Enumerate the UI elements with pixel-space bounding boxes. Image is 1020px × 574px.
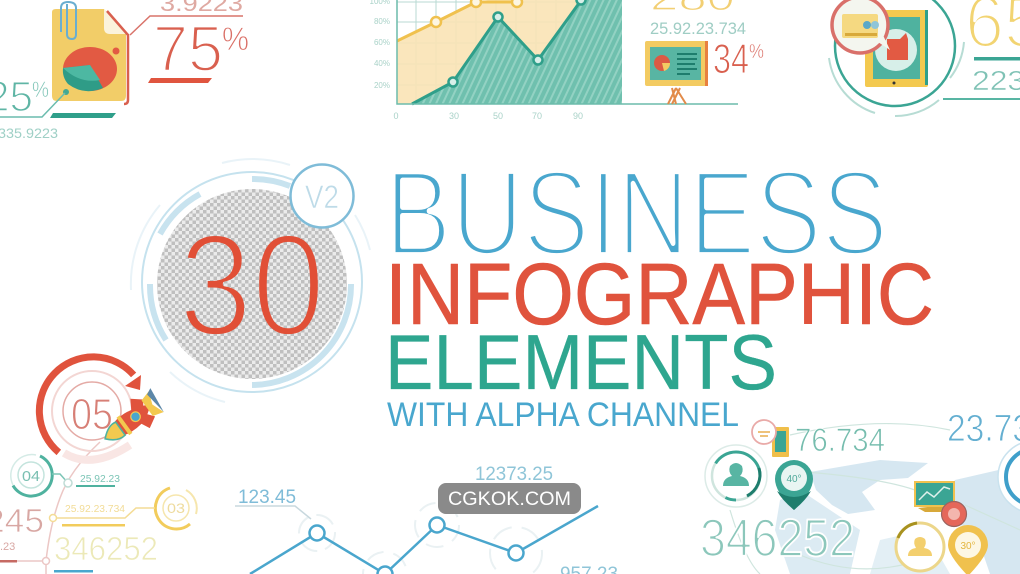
- y axis labels: 20%: [374, 81, 390, 90]
- text: 123.45: 123.45: [238, 487, 296, 508]
- callout line: green: [0, 93, 65, 117]
- panel: rocket timeline, bottom left: [0, 357, 197, 574]
- x axis labels: 0: [393, 111, 399, 121]
- icon: speech bubble with card: [832, 0, 890, 53]
- bar: red short: [0, 560, 17, 562]
- ring: outer faint arcs: [131, 159, 370, 402]
- connector 04: [52, 474, 72, 487]
- icon: map pin yellow: [948, 525, 988, 574]
- icon: user ring green: [705, 445, 767, 507]
- subtitle: WITH ALPHA CHANNEL: WITH ALPHA CHANNEL: [387, 396, 739, 434]
- red progress arrow: [39, 357, 141, 452]
- connector 03: [50, 508, 155, 522]
- line: green: [943, 98, 1020, 100]
- text: 23: .23: [0, 541, 15, 553]
- number 30: 30: [179, 204, 325, 366]
- data points: [310, 518, 524, 574]
- bar: green: [974, 57, 1020, 60]
- ring: thick light-blue segments: [150, 179, 351, 385]
- x axis labels: [393, 111, 583, 121]
- panel: 30 badge with V2: [131, 159, 370, 402]
- text: 12373.25: 12373.25: [475, 464, 553, 485]
- green area series: [412, 0, 622, 104]
- line series: [250, 506, 598, 574]
- y axis labels: 40%: [374, 59, 390, 68]
- icon: rocket: [95, 386, 169, 453]
- bar: yellow: [62, 524, 125, 526]
- chart axes: [397, 0, 738, 104]
- panel: blue line chart, bottom centre: [235, 464, 618, 574]
- watermark: CGKOK.COM: [438, 483, 581, 514]
- ring: 04: 04: [22, 468, 40, 485]
- icon: blue user ring: [998, 441, 1020, 513]
- title: INFOGRAPHIC: INFOGRAPHIC: [385, 246, 934, 343]
- ring: main circle: [835, 0, 955, 106]
- bar: blue: [54, 570, 93, 572]
- y axis labels: 80%: [374, 17, 390, 26]
- text: 346252: 346252: [700, 509, 855, 568]
- node: [42, 558, 50, 564]
- x axis labels: 30: [449, 111, 459, 121]
- icon: tablet: [865, 10, 928, 87]
- x axis labels: 70: [532, 111, 542, 121]
- ring: inner: [63, 382, 121, 440]
- icon: phone: [772, 427, 789, 457]
- ring: 03: [155, 488, 197, 529]
- icon: map pin green: 40°: [786, 474, 802, 485]
- y axis labels: [370, 0, 390, 90]
- ring: pink outer: [52, 371, 132, 451]
- map: world map silhouette: [775, 460, 1020, 574]
- ring: thin outer: [142, 172, 362, 392]
- title: ELEMENTS: ELEMENTS: [385, 318, 777, 406]
- icon: presentation board: [645, 41, 708, 104]
- panel: tablet marketing ring, top right: [829, 0, 1020, 116]
- chart grid: [397, 0, 622, 104]
- V2 badge: V2: [305, 179, 339, 215]
- yellow line series: [397, 0, 522, 41]
- panel: world map stats, bottom right: [700, 408, 1020, 574]
- icon: document with pie chart: [52, 2, 128, 104]
- text: 25.92.23.734: 25.92.23.734: [650, 19, 746, 38]
- bar: green: [50, 113, 116, 118]
- text: percent sign red: %: [222, 21, 249, 57]
- icon: red badge: [942, 502, 966, 526]
- text: 34: 34: [713, 35, 749, 82]
- icon: speech bubble small: [752, 420, 776, 444]
- callout line: red: [130, 16, 243, 35]
- text: 05: 05: [71, 390, 113, 439]
- icon: chart board: [914, 481, 956, 512]
- ring: 03: 03: [167, 500, 185, 516]
- V2 badge: [290, 164, 354, 228]
- ring: pink shadow: [64, 445, 130, 460]
- x axis labels: 90: [573, 111, 583, 121]
- checker circle: [157, 189, 347, 379]
- panel: area line chart, top centre: [370, 0, 764, 121]
- text: 25.92.23: 25.92.23: [80, 474, 120, 485]
- text: percent sign green: %: [32, 77, 49, 102]
- icon: user ring yellow: [896, 523, 944, 571]
- text: 25.92.23.734 small: 25.92.23.734: [65, 504, 125, 515]
- text: 346252 yellow: 346252: [54, 530, 158, 567]
- panel: document pie chart, top left: [0, 0, 249, 141]
- yellow area series: [397, 0, 580, 104]
- halo rings: [299, 503, 542, 574]
- y axis labels: 60%: [374, 38, 390, 47]
- bar: red: [148, 78, 212, 83]
- title: BUSINESS: BUSINESS: [385, 145, 888, 281]
- green line series: [412, 0, 586, 104]
- x axis labels: 50: [493, 111, 503, 121]
- timeline curve: [15, 442, 100, 574]
- text: percent sign: %: [749, 41, 764, 63]
- connection arcs: [730, 424, 1020, 574]
- watermark: CGKOK.COM: CGKOK.COM: [448, 489, 571, 510]
- icon: map pin yellow: 30°: [960, 541, 976, 552]
- ring: 04: [11, 455, 52, 496]
- leader line: [235, 506, 311, 519]
- bar: green: [76, 485, 115, 487]
- text: 75%: 75: [153, 12, 223, 85]
- text: 76.734: 76.734: [795, 422, 885, 458]
- icon: map pin green: [775, 460, 813, 510]
- ring: outer decoration: [829, 42, 964, 116]
